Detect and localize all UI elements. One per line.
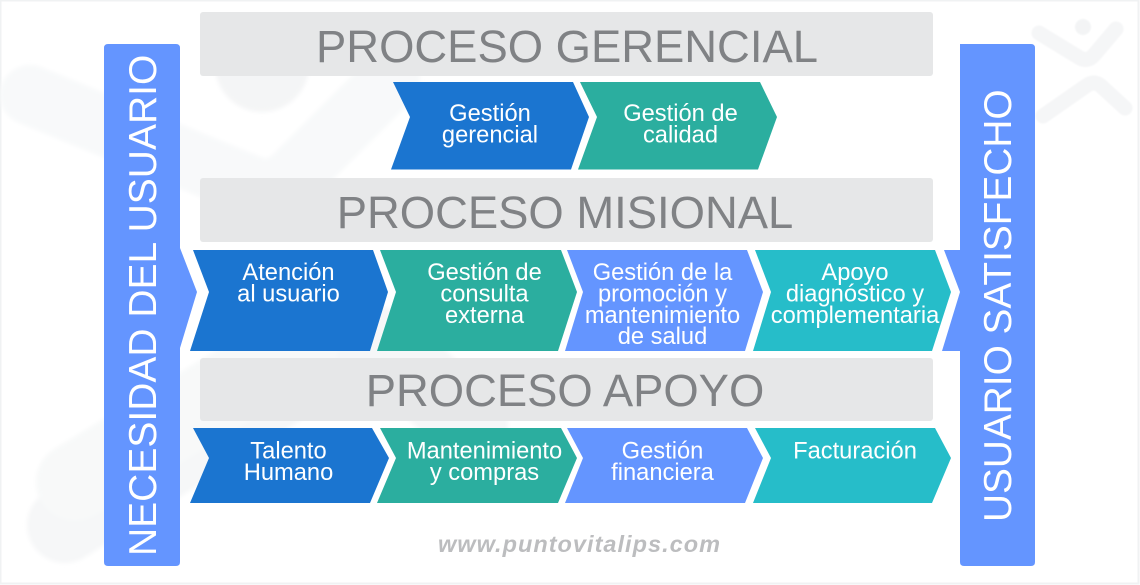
chevron: apoyo diagnostico: Apoyo: [821, 260, 889, 286]
chevron: gestion de la promocion: [565, 250, 763, 351]
chevron: apoyo diagnostico: complementaria: [771, 303, 940, 329]
heading: proceso gerencial: PROCESO GERENCIAL: [316, 21, 818, 72]
chevron: mantenimiento y compras: y compras: [430, 460, 539, 486]
chevron: gestion financiera: Gestión: [622, 438, 703, 464]
right bar: usuario satisfecho: USUARIO SATISFECHO: [977, 89, 1020, 522]
row: gerencial chevrons: [391, 82, 777, 170]
chevron: gestion gerencial: Gestión: [449, 101, 531, 127]
watermark: running figure small: [1039, 19, 1125, 116]
right bar: usuario satisfecho: [942, 44, 1035, 566]
chevron: gestion de consulta externa: consulta: [440, 282, 529, 308]
chevron: gestion de la promocion: mantenimiento: [585, 303, 740, 329]
chevron: atencion al usuario: Atención: [242, 260, 335, 286]
chevron: apoyo diagnostico: [753, 250, 951, 351]
chevron: facturacion: Facturación: [793, 438, 917, 464]
chevron: gestion de la promocion: de salud: [618, 324, 707, 350]
row: misional chevrons: [190, 250, 951, 351]
heading: proceso gerencial: [200, 12, 933, 76]
chevron: atencion al usuario: [190, 250, 388, 351]
website url: www.puntovitalips.com: [438, 531, 720, 557]
chevron: gestion financiera: [565, 428, 763, 503]
chevron: gestion de consulta externa: Gestión de: [427, 260, 542, 286]
chevron: gestion de la promocion: Gestión de la: [593, 260, 733, 286]
chevron: gestion de la promocion: promoción y: [598, 282, 727, 308]
left bar: necesidad del usuario: NECESIDAD DEL USUARIO: [122, 55, 165, 556]
chevron: atencion al usuario: al usuario: [237, 282, 340, 308]
chevron: gestion de calidad: [578, 82, 777, 170]
chevron: gestion de calidad: calidad: [643, 122, 718, 148]
chevron: gestion financiera: financiera: [611, 460, 715, 486]
chevron: mantenimiento y compras: [377, 428, 577, 503]
chevron: gestion gerencial: [391, 82, 589, 170]
left bar: necesidad del usuario: [104, 44, 197, 566]
chevron: gestion de consulta externa: externa: [445, 303, 525, 329]
chevron: talento humano: [190, 428, 389, 503]
chevron: talento humano: Talento: [250, 438, 327, 464]
heading: proceso apoyo: PROCESO APOYO: [366, 365, 764, 416]
chevron: gestion de calidad: Gestión de: [623, 101, 738, 127]
watermark: running figure large: [30, 18, 470, 525]
chevron: facturacion: [753, 428, 951, 503]
heading: proceso misional: [200, 178, 933, 242]
chevron: gestion gerencial: gerencial: [442, 122, 538, 148]
heading: proceso misional: PROCESO MISIONAL: [337, 187, 793, 238]
row: apoyo chevrons: [190, 428, 951, 503]
chevron: gestion de consulta externa: [377, 250, 577, 351]
chevron: talento humano: Humano: [244, 460, 333, 486]
heading: proceso apoyo: [200, 358, 933, 421]
chevron: mantenimiento y compras: Mantenimiento: [407, 438, 562, 464]
chevron: apoyo diagnostico: diagnóstico y: [786, 282, 924, 308]
